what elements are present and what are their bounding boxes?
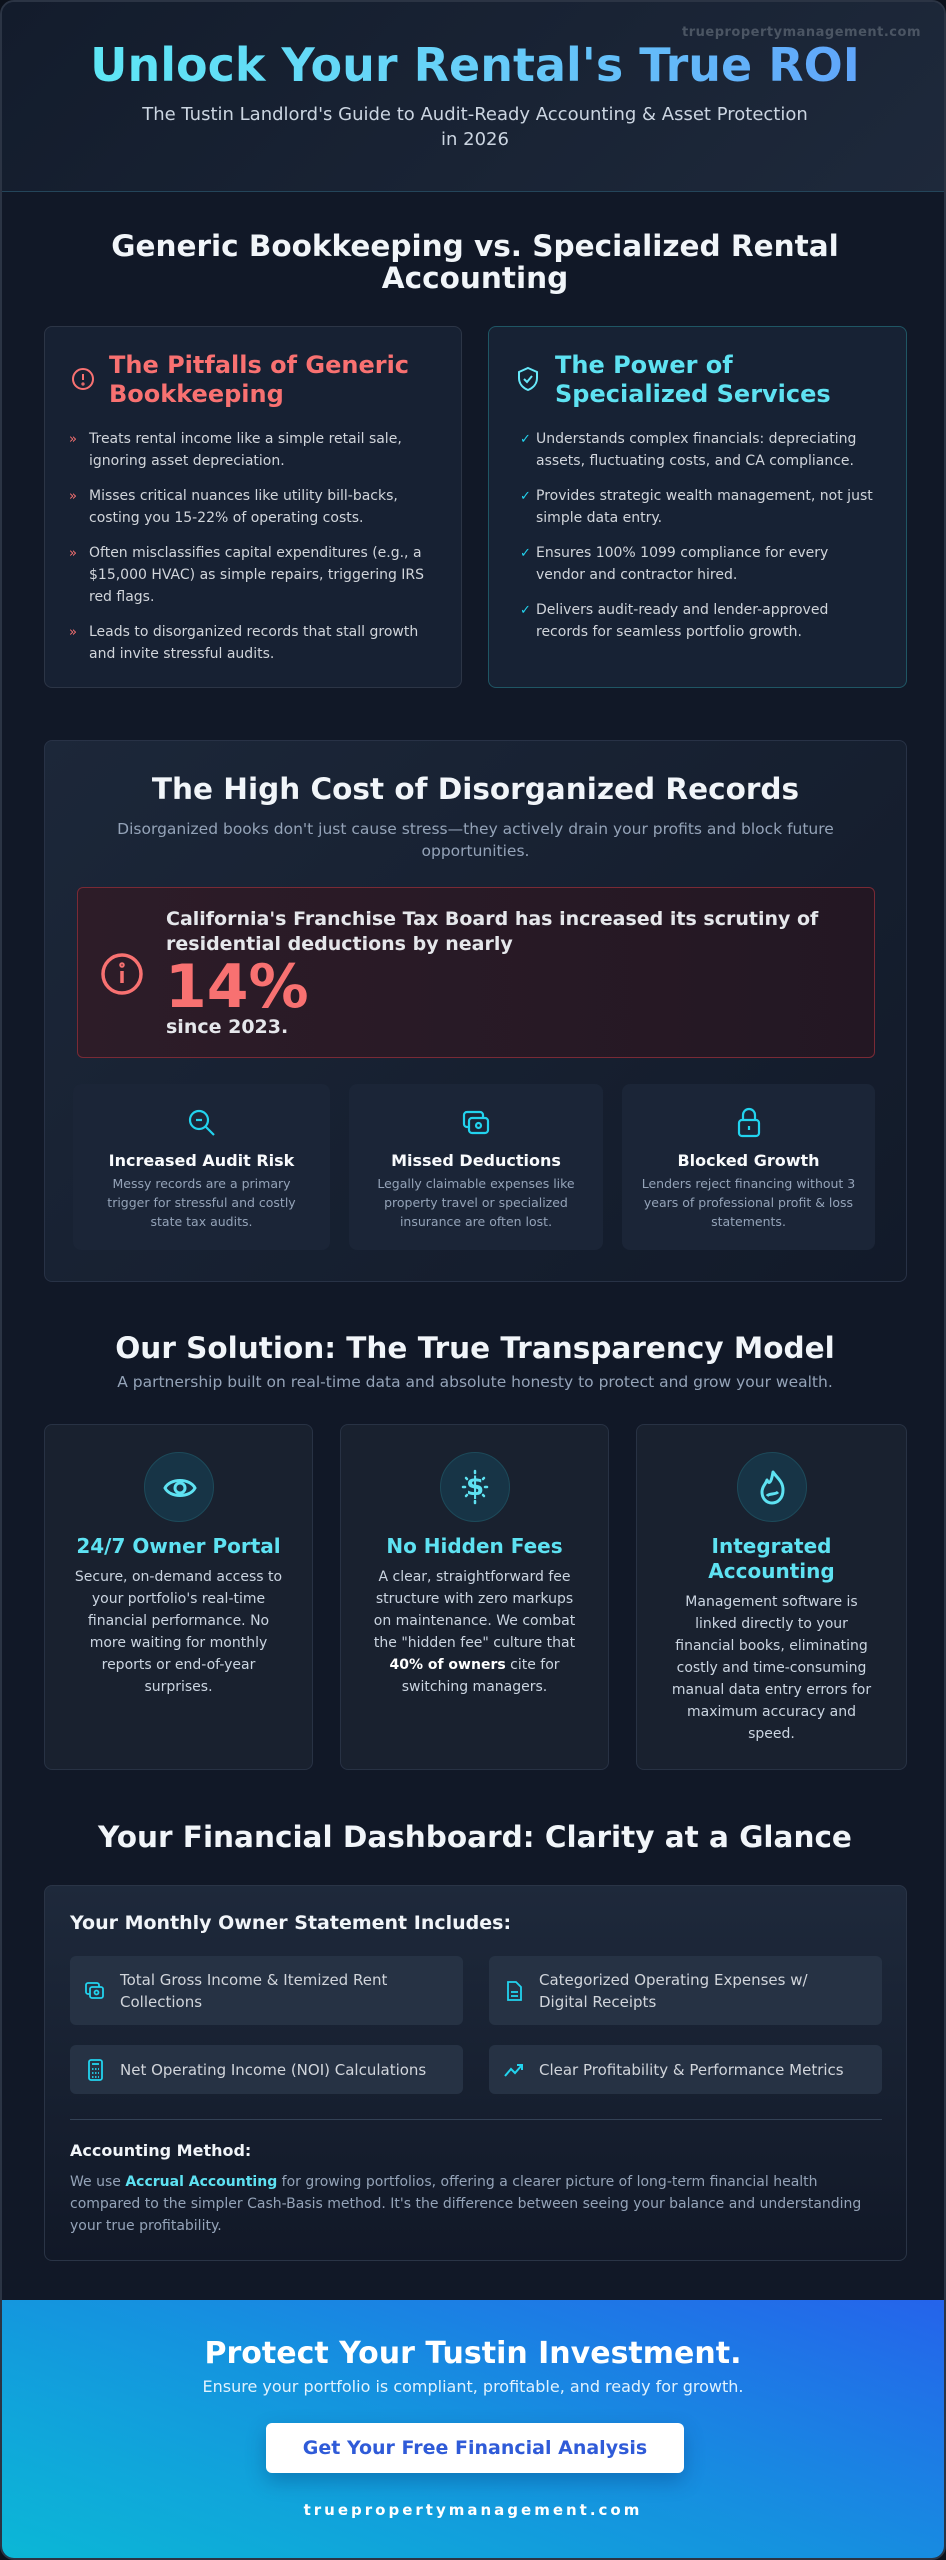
specialized list: Delivers audit-ready and lender-approved records for seamless portfolio growth. (536, 602, 828, 640)
icon: alert (72, 368, 94, 390)
panel: pitfalls: » (69, 489, 77, 504)
high cost subtitle: Disorganized books don't just cause stress—they actively drain your profits and block future opportunities. (117, 820, 834, 860)
accounting method label: Accounting Method: (70, 2141, 251, 2160)
panel: pitfalls: » (69, 432, 77, 447)
card: audit risk: Increased Audit Risk (109, 1151, 294, 1170)
specialized list (520, 431, 873, 640)
pitfalls list: Leads to disorganized records that stall growth and invite stressful audits. (89, 624, 418, 662)
panel: specialized (488, 326, 907, 688)
card: no hidden fees (340, 1424, 609, 1770)
CTA domain: truepropertymanagement.com (304, 2501, 642, 2519)
icon: money (462, 1110, 490, 1134)
header band (2, 2, 946, 192)
item: gross income (70, 1956, 463, 2025)
watermark: truepropertymanagement.com (682, 25, 921, 40)
card: blocked growth: Blocked Growth (677, 1151, 820, 1170)
item: expenses (489, 1956, 882, 2025)
pitfalls list: Misses critical nuances like utility bill-backs, costing you 15-22% of operating costs. (89, 488, 398, 526)
panel: specialized: ✓ (520, 603, 531, 618)
fees text: No Hidden Fees (386, 1534, 563, 1558)
subtitle (142, 104, 808, 150)
panel: specialized: ✓ (520, 489, 531, 504)
card: audit risk: Messy records are a primary trigger for stressful and costly state tax audits. (107, 1176, 296, 1229)
item: expenses: Categorized Operating Expenses w/ Digital Receipts (539, 1970, 808, 2010)
item: NOI (70, 2045, 463, 2094)
card: missed deductions: Legally claimable expenses like property travel or specialized insurance are often lost. (377, 1176, 575, 1229)
card: blocked growth (622, 1084, 875, 1250)
icon: magnifier (188, 1110, 215, 1136)
item: NOI: Net Operating Income (NOI) Calculations (120, 2060, 426, 2078)
card: owner portal (44, 1424, 313, 1770)
integrated text: Integrated (712, 1534, 831, 1558)
title: Unlock Your Rental's True ROI (90, 38, 860, 92)
card: integrated accounting (636, 1424, 907, 1770)
pitfalls list (69, 431, 424, 662)
heading: dashboard: Your Financial Dashboard: Clarity at a Glance (98, 1820, 852, 1854)
panel: specialized: ✓ (520, 432, 531, 447)
stat text: California's Franchise Tax Board has increased its scrutiny of residential deductions by nearly (166, 908, 818, 955)
subtitle: The Tustin Landlord's Guide to Audit-Ready Accounting & Asset Protection (142, 104, 808, 125)
CTA button (266, 2423, 684, 2473)
stat number: 14% (165, 952, 309, 1022)
CTA subtitle: Ensure your portfolio is compliant, profitable, and ready for growth. (203, 2377, 743, 2396)
icon: dollar (440, 1452, 510, 1522)
CTA heading: Protect Your Tustin Investment. (205, 2336, 741, 2371)
panel: pitfalls (44, 326, 462, 688)
icon: info (101, 953, 143, 995)
pitfalls list: Often misclassifies capital expenditures (e.g., a $15,000 HVAC) as simple repairs, triggering IRS red flags. (89, 545, 424, 605)
card: blocked growth: Lenders reject financing without 3 years of professional profit & loss statements. (642, 1176, 855, 1229)
subtitle: in 2026 (441, 129, 509, 150)
icon: lock (738, 1108, 760, 1138)
integrated text: Accounting (708, 1559, 835, 1583)
panel: pitfalls: » (69, 546, 77, 561)
panel: dashboard (44, 1885, 907, 2261)
dashboard heading: Your Monthly Owner Statement Includes: (70, 1912, 511, 1934)
card: missed deductions: Missed Deductions (391, 1151, 561, 1170)
integrated text: Management software is linked directly to your financial books, eliminating costly and time-consuming manual data entry errors for maximum accuracy and speed. (672, 1594, 871, 1742)
item: metrics (489, 2045, 882, 2094)
specialized list: Ensures 100% 1099 compliance for every vendor and contractor hired. (536, 545, 828, 583)
specialized list: Understands complex financials: depreciating assets, fluctuating costs, and CA compliance. (536, 431, 856, 469)
icon: shield (518, 366, 538, 392)
solution subtitle: A partnership built on real-time data and absolute honesty to protect and grow your wealth. (117, 1373, 833, 1391)
CTA band (2, 2300, 946, 2560)
heading: comparison: Generic Bookkeeping vs. Specialized Rental Accounting (111, 229, 839, 295)
icon: dollar: $ (466, 1472, 484, 1502)
specialized heading: The Power of Specialized Services (555, 351, 831, 408)
panel: specialized: ✓ (520, 546, 531, 561)
specialized list: Provides strategic wealth management, not just simple data entry. (536, 488, 873, 526)
panel: high cost (44, 740, 907, 1282)
card: missed deductions (349, 1084, 603, 1250)
item: metrics: Clear Profitability & Performance Metrics (539, 2060, 844, 2078)
portal text: Secure, on-demand access to your portfolio's real-time financial performance. No more waiting for monthly reports or end-of-year surprises. (75, 1569, 282, 1695)
card: audit risk (73, 1084, 330, 1250)
callout: FTB stat (77, 887, 875, 1058)
stat suffix: since 2023. (166, 1016, 288, 1038)
icon: flame (737, 1452, 807, 1522)
accounting method text: We use Accrual Accounting for growing portfolios, offering a clearer picture of long-term financial health compared to the simpler Cash-Basis method. It's the difference between seeing your balance and understanding your true profitability. (70, 2174, 861, 2234)
icon: eye (144, 1452, 214, 1522)
panel: pitfalls: » (69, 625, 77, 640)
heading: solution: Our Solution: The True Transparency Model (115, 1331, 835, 1365)
pitfalls list: Treats rental income like a simple retail sale, ignoring asset depreciation. (89, 431, 402, 469)
item: gross income: Total Gross Income & Itemized Rent Collections (120, 1970, 387, 2010)
CTA button: Get Your Free Financial Analysis (303, 2437, 647, 2459)
high cost heading: The High Cost of Disorganized Records (152, 772, 799, 806)
portal text: 24/7 Owner Portal (76, 1534, 281, 1558)
pitfalls heading: The Pitfalls of Generic Bookkeeping (109, 351, 409, 408)
fees text: A clear, straightforward fee structure with zero markups on maintenance. We combat the "hidden fee" culture that 40% of owners cite for switching managers. (374, 1569, 575, 1695)
